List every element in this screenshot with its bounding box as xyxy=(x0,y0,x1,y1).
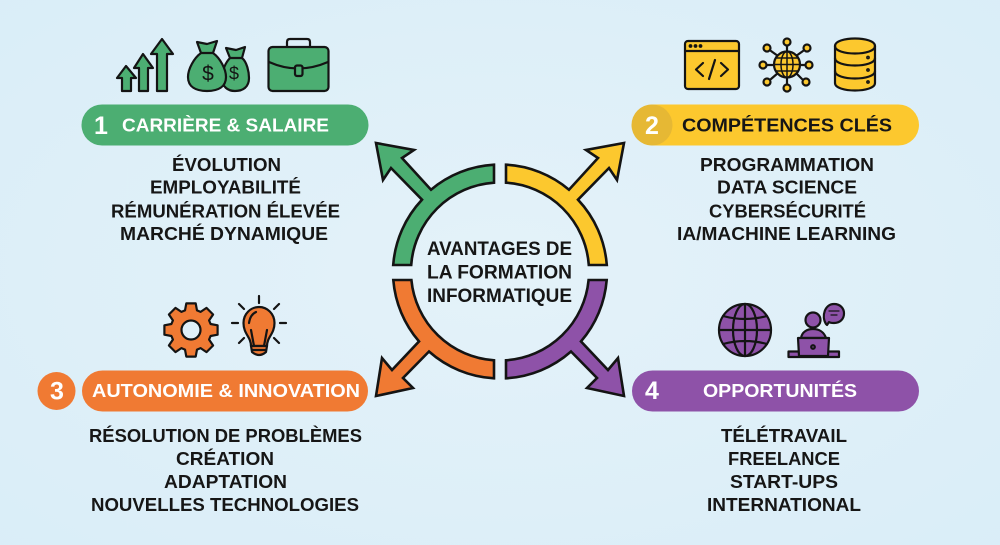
pill: autonomy and innovation xyxy=(82,370,368,412)
icon: rising arrows xyxy=(117,39,173,91)
badge: number 3: 3 xyxy=(50,378,64,406)
pill: career and salary xyxy=(82,104,368,146)
icon: light bulb xyxy=(232,296,286,355)
pill: opportunities: OPPORTUNITÉS xyxy=(703,380,857,401)
central title xyxy=(427,238,572,307)
text block: autonomy list: RÉSOLUTION DE PROBLÈMES xyxy=(89,425,362,446)
central title: LA FORMATION xyxy=(427,262,572,284)
icon: globe xyxy=(719,304,771,356)
text block: opportunities list: TÉLÉTRAVAIL xyxy=(721,425,847,446)
icon: money bags: $ xyxy=(229,64,239,84)
text block: opportunities list: FREELANCE xyxy=(728,448,840,469)
icon: money bags: $ xyxy=(202,62,214,86)
text block: opportunities list: START-UPS xyxy=(730,471,838,492)
arrow: purple, to opportunities xyxy=(506,280,624,396)
icon: gear xyxy=(164,303,218,357)
pill: opportunities xyxy=(632,370,919,412)
arrow: yellow, to skills xyxy=(506,143,624,265)
text block: opportunities list xyxy=(707,425,861,515)
central title: AVANTAGES DE xyxy=(427,238,572,260)
central title: INFORMATIQUE xyxy=(427,285,572,307)
text block: career list: ÉVOLUTION xyxy=(172,154,281,175)
text block: opportunities list: INTERNATIONAL xyxy=(707,494,861,515)
central ring of four arrows xyxy=(376,143,624,396)
arrow: orange, to autonomy xyxy=(376,280,494,396)
text block: autonomy list: NOUVELLES TECHNOLOGIES xyxy=(91,494,359,515)
text block: career list: RÉMUNÉRATION ÉLEVÉE xyxy=(111,200,340,222)
pill: autonomy and innovation: AUTONOMIE & INNOVATION xyxy=(92,380,360,401)
text block: career list xyxy=(111,154,340,244)
text block: skills list xyxy=(677,154,896,244)
text block: skills list: DATA SCIENCE xyxy=(717,176,857,198)
pill: career and salary: CARRIÈRE & SALAIRE xyxy=(122,114,329,136)
pill: career and salary: 1 xyxy=(94,112,108,140)
pill: key skills: COMPÉTENCES CLÉS xyxy=(682,114,892,136)
text block: skills list: PROGRAMMATION xyxy=(700,154,874,175)
pill: opportunities: 4 xyxy=(645,377,659,405)
pill: key skills: 2 xyxy=(645,112,659,140)
icon: network globe xyxy=(760,38,812,92)
badge: number 3 xyxy=(38,372,76,410)
icon: database xyxy=(835,38,875,90)
icon: money bags xyxy=(188,41,249,91)
icon: remote worker with laptop xyxy=(788,304,844,357)
text block: autonomy list: CRÉATION xyxy=(176,448,274,469)
pill: key skills xyxy=(632,104,919,146)
text block: career list: EMPLOYABILITÉ xyxy=(150,176,301,198)
text block: skills list: CYBERSÉCURITÉ xyxy=(709,200,866,222)
text block: autonomy list: ADAPTATION xyxy=(164,471,287,492)
text block: autonomy list xyxy=(89,425,362,515)
icon: code window xyxy=(685,41,739,89)
text block: skills list: IA/MACHINE LEARNING xyxy=(677,223,896,244)
icon: briefcase xyxy=(268,39,328,91)
arrow: green, to career xyxy=(376,143,494,265)
text block: career list: MARCHÉ DYNAMIQUE xyxy=(120,223,328,244)
